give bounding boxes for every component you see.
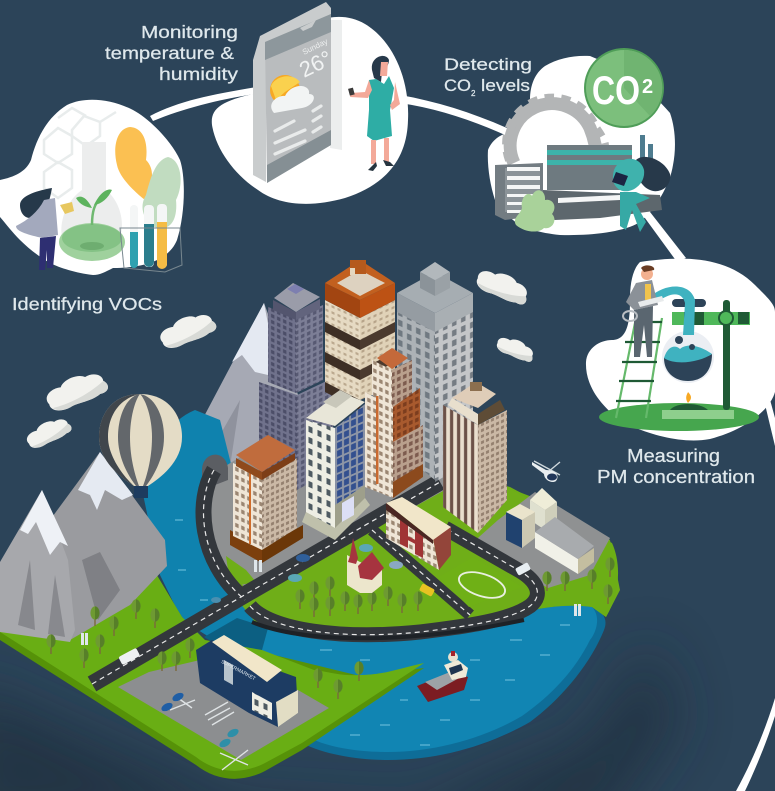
building: left orange-roof block	[230, 435, 303, 563]
label: detecting CO2 levels: Detecting	[444, 55, 532, 74]
label: detecting CO2 levels: CO	[444, 76, 471, 95]
panel: measuring PM concentration	[586, 259, 775, 441]
panel: identifying VOCs	[0, 100, 184, 275]
hexagon pattern	[44, 108, 116, 198]
label: monitoring temperature and humidity: humidity	[159, 64, 238, 84]
building: church	[347, 538, 384, 593]
icon: grey gear	[507, 99, 604, 181]
parked cars	[160, 691, 240, 749]
icon: burner flame	[670, 392, 708, 410]
icon: phone shadow	[330, 20, 342, 150]
icon: green bush	[515, 190, 554, 232]
roads	[92, 470, 537, 684]
panel: monitoring temperature and humidity	[212, 2, 408, 204]
panel: detecting CO2 levels	[488, 48, 675, 235]
icon: orange leaf	[115, 127, 152, 200]
label: monitoring temperature and humidity: Monitoring	[141, 22, 238, 42]
road dashes	[92, 470, 537, 684]
icon: ladder	[616, 318, 662, 418]
grey parking lot	[118, 660, 329, 760]
boat	[417, 651, 468, 702]
icon: factory building	[495, 135, 662, 220]
icon: test tubes	[120, 204, 182, 272]
icon: man on ladder	[623, 265, 664, 357]
left green island with depth	[0, 560, 424, 779]
dark water under the bridge	[204, 618, 268, 652]
buildings: right cluster	[506, 488, 594, 574]
football field	[439, 557, 522, 607]
icon: woman in teal dress	[348, 56, 400, 171]
grey pavement right cluster	[470, 492, 610, 588]
right green rim	[506, 487, 618, 617]
water ripples	[165, 455, 570, 745]
label: measuring PM concentration	[597, 446, 755, 487]
bottom shadow below the island	[0, 640, 680, 791]
small lawn by the left block	[226, 556, 256, 585]
connector line: CO2 to PM	[642, 212, 686, 262]
label: detecting CO2 levels	[444, 55, 532, 98]
blob: VOCs background	[0, 100, 184, 275]
building: orange-trim central tower	[365, 348, 423, 498]
city grey pavement	[206, 420, 445, 596]
icon: woman in teal	[612, 157, 670, 232]
tunnel entrance	[202, 455, 228, 490]
parking markings	[170, 698, 248, 770]
hot air balloon	[99, 394, 182, 498]
label: identifying VOCs: Identifying VOCs	[12, 294, 162, 314]
badge superscript: 2	[642, 76, 653, 98]
blob: CO2 background	[488, 56, 675, 235]
icon: CO2 badge	[584, 48, 664, 128]
building: supermarket: SUPERMARKET	[220, 659, 256, 682]
label: measuring PM concentration: Measuring	[627, 446, 720, 466]
main water body	[165, 455, 606, 760]
icon: flask	[61, 142, 122, 250]
connector line: PM curving off the page	[763, 396, 775, 446]
building: grey tower	[397, 262, 473, 482]
mountain behind the city	[182, 303, 300, 560]
building: red-brick school	[386, 497, 451, 570]
badge text: CO	[592, 69, 640, 113]
label: detecting CO2 levels: 2	[471, 89, 476, 98]
clouds	[23, 263, 537, 451]
label: monitoring temperature and humidity	[105, 22, 238, 84]
icon: round flask	[662, 331, 714, 383]
building: beige striped tower	[443, 382, 507, 533]
icon: green dish with seedling	[59, 190, 125, 261]
icon: smartphone	[253, 2, 336, 183]
helicopter	[532, 461, 560, 482]
icon: woman in lab coat	[16, 188, 74, 270]
mountains on the left	[0, 452, 167, 642]
icon: green leaf	[143, 157, 181, 228]
connector line: lower right arc	[736, 698, 775, 791]
park trees	[46, 557, 615, 699]
blob: PM background	[586, 259, 775, 441]
connector line: VOCs to temperature	[150, 86, 262, 121]
phone temperature: 26°	[295, 45, 336, 82]
icon: teal tube	[650, 286, 695, 335]
building: supermarket	[196, 635, 298, 727]
label: measuring PM concentration: PM concentration	[597, 467, 755, 487]
building: rust striped tower	[325, 260, 395, 410]
building: white and blue office	[302, 390, 370, 540]
icon: retort stand	[672, 299, 750, 410]
label: monitoring temperature and humidity: temperature &	[105, 43, 234, 63]
central city ground	[205, 430, 620, 635]
blob: temperature background	[212, 17, 408, 204]
icon: green base plate	[599, 403, 759, 431]
label: detecting CO2 levels: levels	[481, 76, 530, 95]
right small fences and signs	[81, 560, 581, 645]
phone forecast lines	[275, 106, 321, 154]
connector line: temperature to CO2	[400, 95, 520, 140]
building: purple-grey tower	[259, 283, 333, 490]
small vehicles	[118, 544, 531, 665]
phone date label: Sunday	[301, 37, 329, 57]
river: left channel water	[140, 410, 262, 655]
road bridge shadow	[252, 620, 524, 638]
icon: sun and cloud	[270, 75, 314, 113]
